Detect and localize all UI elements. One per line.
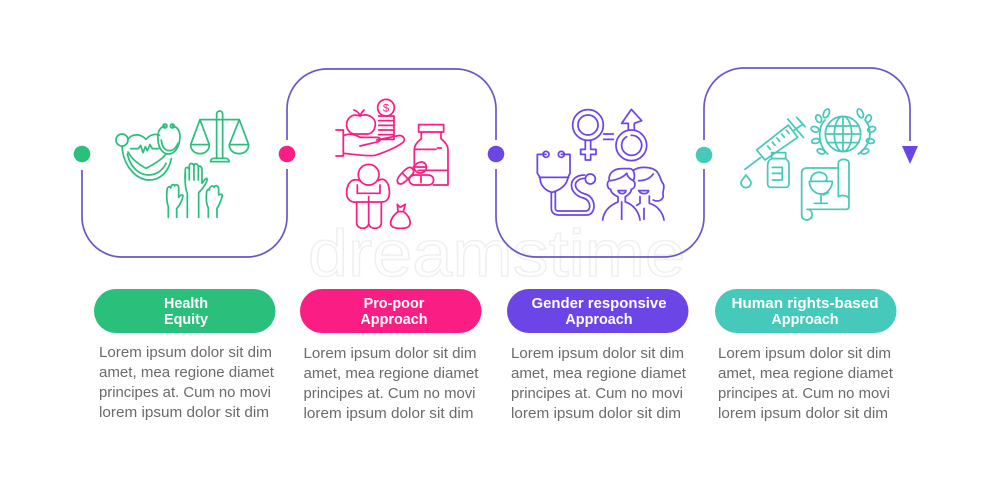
- text block: pro-poor: principes at. Cum no movi: [304, 386, 476, 402]
- pill: human rights-based approach: Approach: [771, 312, 839, 328]
- text block: gender responsive: amet, mea regione diamet: [511, 366, 686, 382]
- icon: female symbol: [573, 110, 603, 160]
- text block: gender responsive: lorem ipsum dolor sit dim: [511, 406, 681, 422]
- step dot: pro-poor: [279, 146, 295, 162]
- pill: pro-poor approach: Pro-poor: [364, 296, 425, 312]
- step dot: gender responsive: [488, 146, 504, 162]
- pill: health equity: [94, 289, 276, 333]
- text block: pro-poor: lorem ipsum dolor sit dim: [304, 406, 474, 422]
- text block: pro-poor: [304, 346, 479, 422]
- icon: sitting person: [347, 164, 389, 228]
- pill: pro-poor approach: [300, 289, 482, 333]
- step dot: human rights: [696, 147, 712, 163]
- pill: health equity: Health: [164, 296, 208, 312]
- text block: pro-poor: Lorem ipsum dolor sit dim: [304, 346, 476, 362]
- text block: human rights: lorem ipsum dolor sit dim: [718, 406, 888, 422]
- text block: human rights: amet, mea regione diamet: [718, 366, 893, 382]
- icon: heart with stethoscope: [116, 124, 180, 180]
- pill: gender responsive approach: [507, 289, 688, 333]
- icon: human rights: [741, 108, 876, 220]
- text block: human rights: principes at. Cum no movi: [718, 386, 890, 402]
- text block: gender responsive: Lorem ipsum dolor sit dim: [511, 346, 684, 362]
- icon: pills: [397, 162, 434, 185]
- icon: male symbol: [616, 109, 647, 161]
- icon: raised hands: [167, 163, 222, 217]
- icon: vial: [768, 153, 789, 187]
- icon: pro-poor: [336, 99, 448, 228]
- icon: money bag: [391, 204, 410, 228]
- watermark: dreamstime: [308, 216, 685, 290]
- pill: gender responsive approach: Gender responsive: [532, 296, 666, 312]
- icon: health equity: [116, 111, 249, 217]
- pill: pro-poor approach: Approach: [360, 312, 428, 328]
- text block: health equity: amet, mea regione diamet: [99, 365, 274, 381]
- text block: human rights: Lorem ipsum dolor sit dim: [718, 346, 891, 362]
- icon: two people: [603, 167, 664, 220]
- text block: health equity: principes at. Cum no movi: [99, 385, 271, 401]
- icon: medicine bottle: [414, 125, 448, 185]
- text block: gender responsive: [511, 346, 686, 422]
- pill: human rights-based approach: [715, 289, 896, 333]
- text block: health equity: lorem ipsum dolor sit dim: [99, 405, 269, 421]
- icon: stethoscope: [537, 151, 595, 215]
- text block: health equity: [99, 345, 274, 421]
- icon: syringe: [741, 117, 805, 188]
- pill: human rights-based approach: Human rights-based: [732, 296, 878, 312]
- text block: human rights: [718, 346, 893, 422]
- icon: scales: [191, 111, 249, 162]
- pill: gender responsive approach: Approach: [565, 312, 633, 328]
- pill: health equity: Equity: [164, 312, 208, 328]
- icon: gender responsive: [537, 109, 664, 220]
- icon: globe with laurel: [810, 108, 876, 155]
- flow line: [82, 68, 910, 257]
- text block: pro-poor: amet, mea regione diamet: [304, 366, 479, 382]
- icon: hand with apple and coins: $: [383, 103, 390, 115]
- icon: scroll with bowl of hygieia: [802, 159, 849, 220]
- arrow head: [902, 146, 918, 164]
- text block: gender responsive: principes at. Cum no movi: [511, 386, 683, 402]
- icon: equals: [604, 134, 613, 139]
- step dot: health equity: [74, 146, 90, 162]
- text block: health equity: Lorem ipsum dolor sit dim: [99, 345, 272, 361]
